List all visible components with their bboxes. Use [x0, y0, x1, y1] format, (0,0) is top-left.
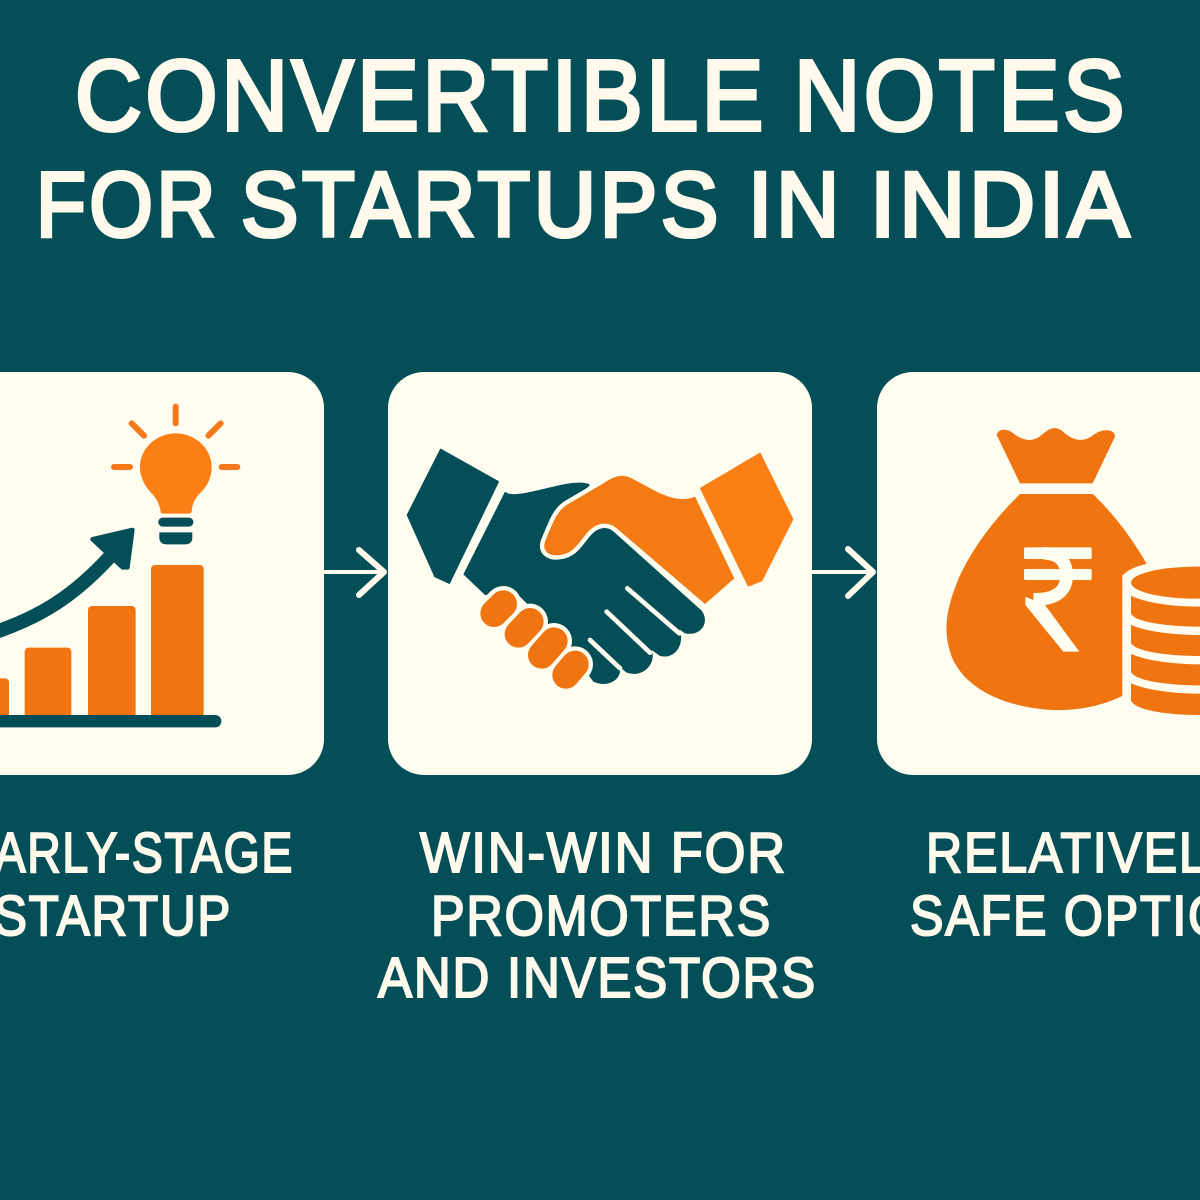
label: win-win for promoters and investors [378, 821, 817, 1010]
panel: relatively safe option [877, 372, 1200, 775]
label: early-stage startup: STARTUP [0, 884, 232, 948]
title: CONVERTIBLE [75, 40, 767, 152]
title: NOTES [794, 40, 1128, 152]
title [36, 40, 1133, 256]
icon: growth chart and lightbulb [0, 407, 237, 727]
fingers [494, 604, 575, 675]
label: win-win for promoters and investors: AND INVESTORS [378, 946, 817, 1010]
label: win-win for promoters and investors: PROMOTERS [431, 884, 772, 948]
icon: rupee money bag and coins [946, 428, 1200, 715]
bar chart [0, 565, 204, 718]
left hand [463, 483, 705, 684]
icon: handshake [407, 449, 793, 684]
left cuff [407, 449, 498, 583]
title: INDIA [870, 154, 1133, 256]
arrow: second to third panel [812, 549, 873, 596]
right hand [544, 476, 734, 604]
icon: lightbulb [114, 407, 237, 544]
money bag body [946, 494, 1147, 710]
title: FOR [36, 154, 219, 256]
panel: win-win handshake [388, 372, 812, 775]
title: IN [748, 154, 843, 256]
label: relatively safe option [910, 821, 1200, 948]
title: STARTUPS [241, 154, 722, 256]
right cuff [701, 453, 793, 586]
label: early-stage startup [0, 821, 294, 948]
money bag tie [997, 428, 1115, 483]
arrow: first to second panel [323, 550, 384, 595]
chart baseline [0, 715, 221, 727]
label: win-win for promoters and investors: WIN-WIN FOR [420, 821, 787, 885]
icon: rupee symbol [1024, 547, 1092, 652]
icon: rising arrow [0, 530, 132, 632]
panel: early-stage startup [0, 372, 324, 775]
icon: coin stack [1131, 567, 1200, 715]
